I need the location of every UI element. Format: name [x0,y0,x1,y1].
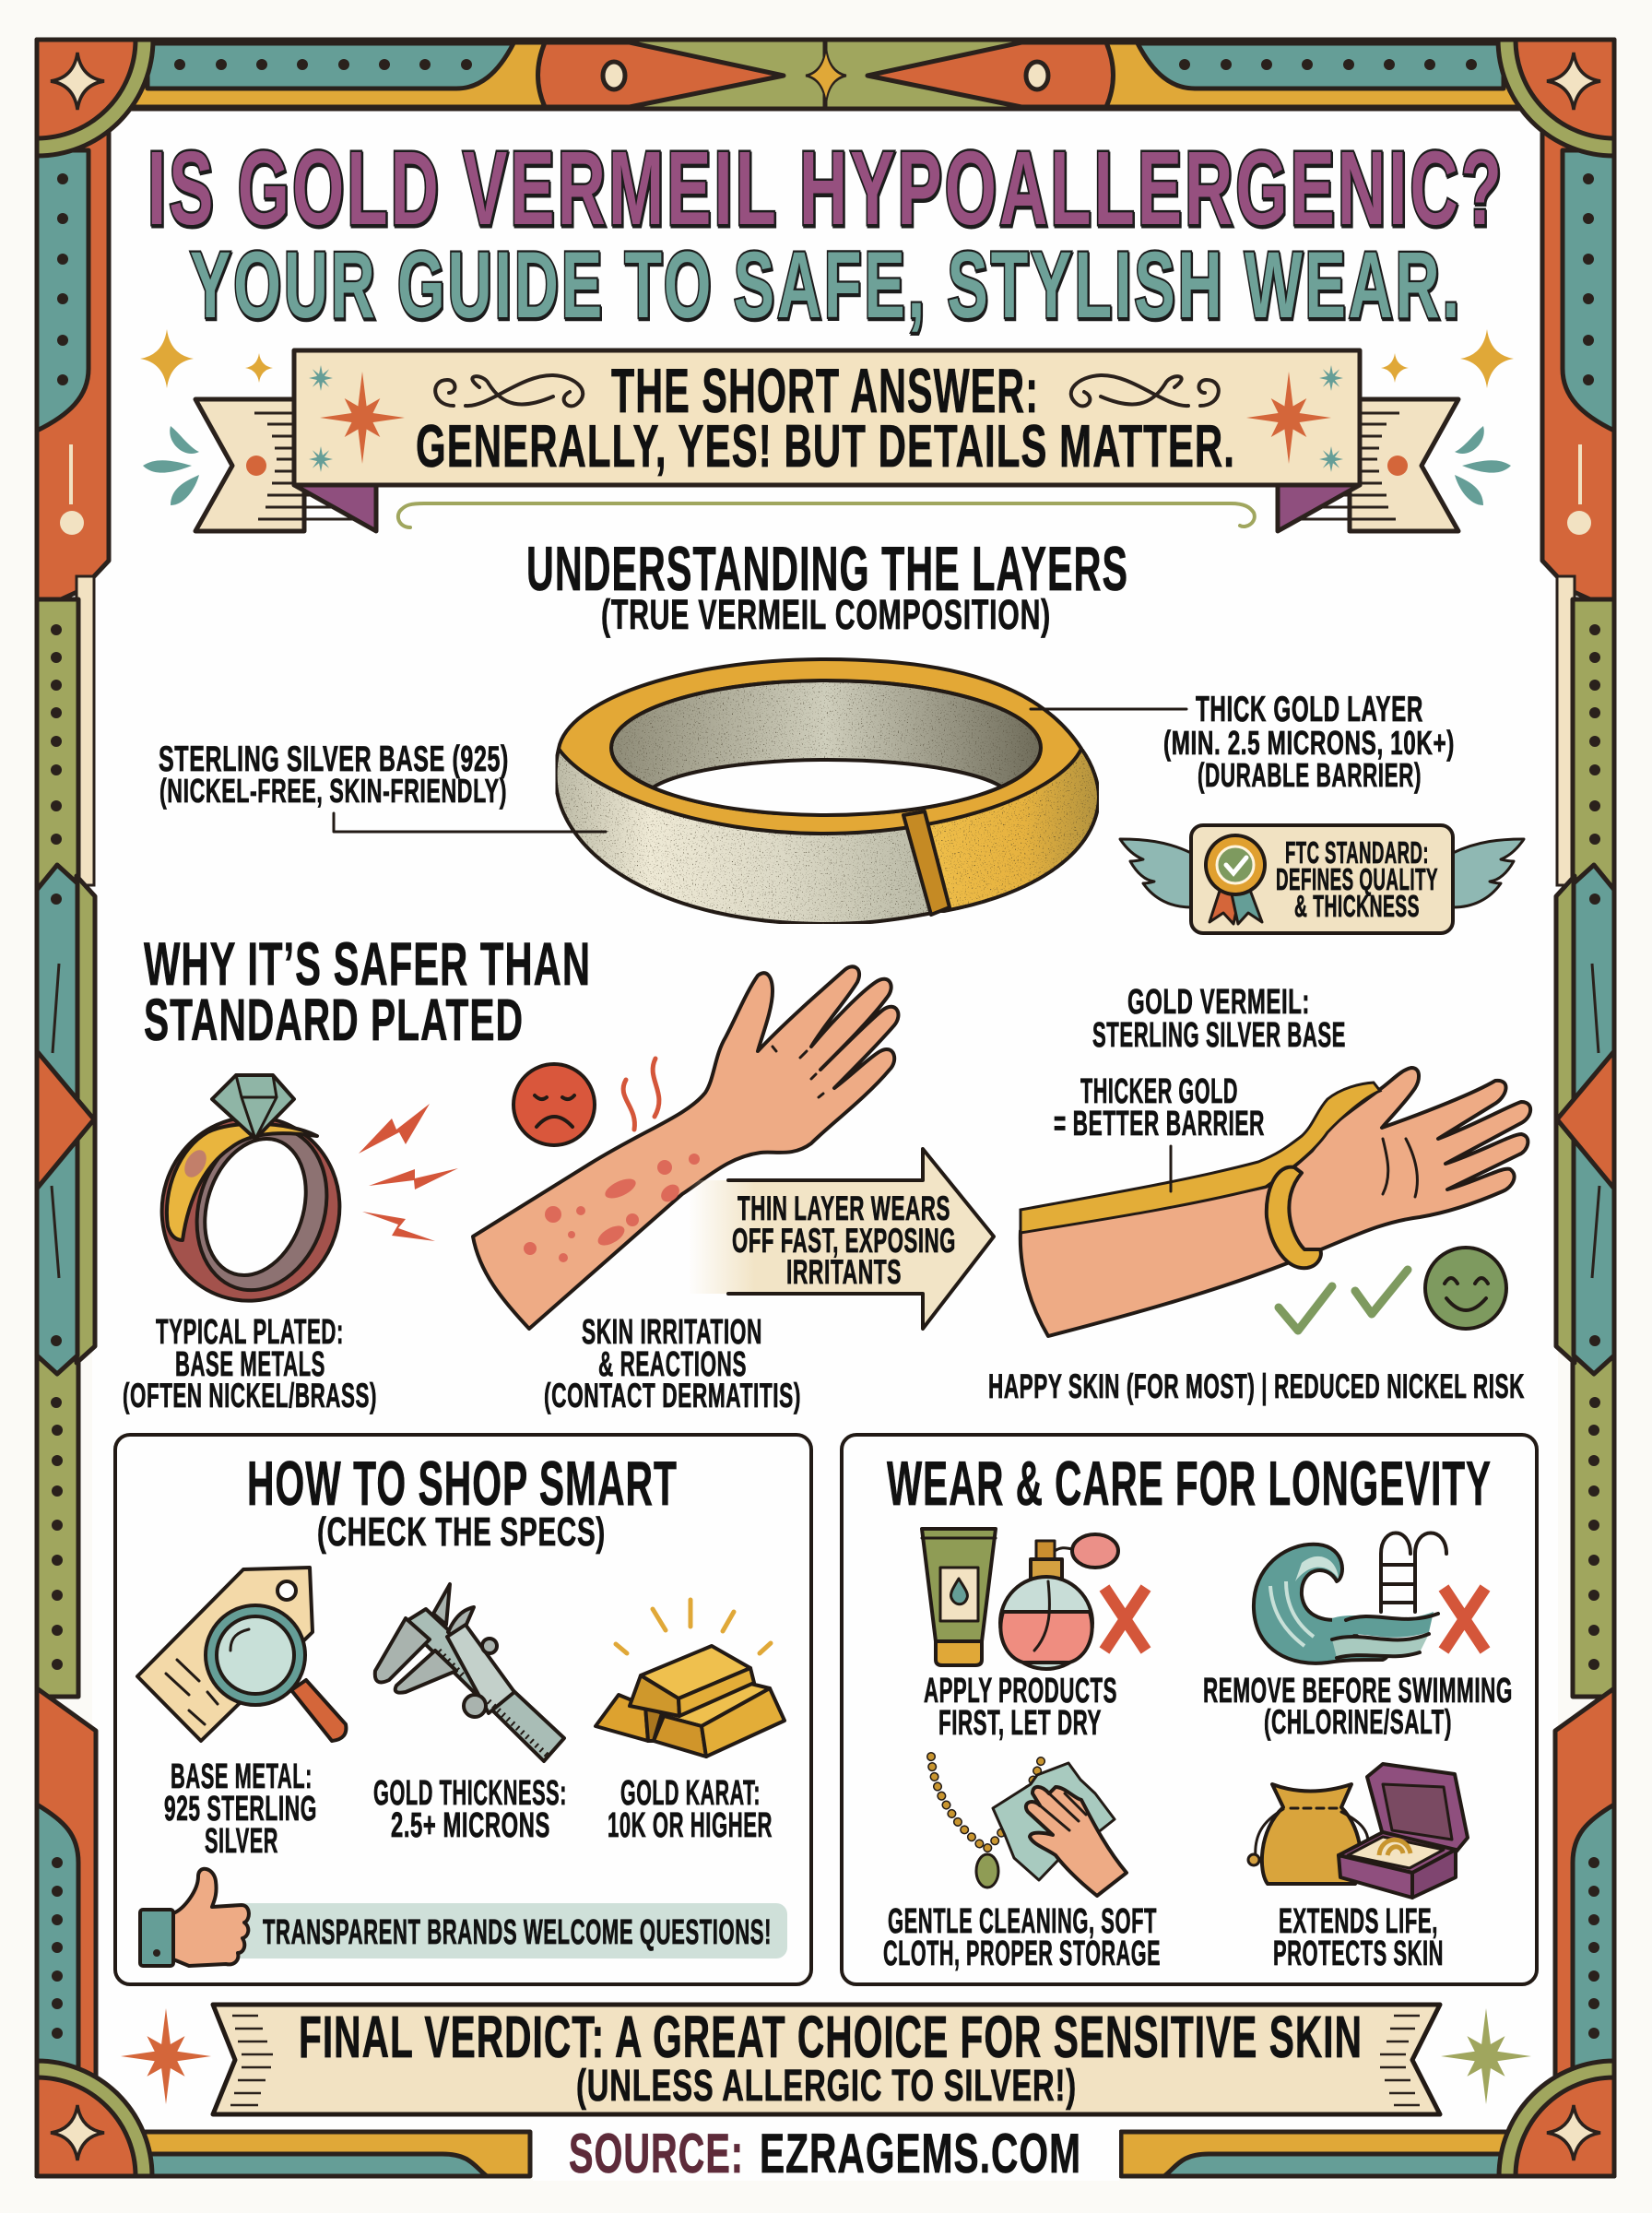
caption: apply products: FIRST, LET DRY [938,1704,1102,1743]
icon: wave and pool ladder [1254,1533,1446,1663]
icon: lotion tube [922,1529,996,1665]
caption: remove before swimming: (CHLORINE/SALT) [1264,1703,1452,1741]
mask frame bottom centre [533,2125,1119,2181]
callout: thick gold layer [1031,690,1455,794]
short answer banner: GENERALLY, YES! BUT DETAILS MATTER. [416,412,1235,479]
caption: base metal [164,1757,317,1861]
source line: EZRAGEMS.COM [760,2123,1081,2184]
caption: skin irritation [544,1313,801,1414]
caption: skin irritation: & REACTIONS [598,1345,747,1384]
heading: why it's safer: WHY IT’S SAFER THAN [144,929,591,998]
icon: check marks [1279,1270,1408,1331]
caption: typical plated: BASE METALS [175,1345,325,1384]
icon: plated ring [138,1075,363,1324]
FTC standard badge: & THICKNESS [1294,889,1420,923]
icon: thumbs up [140,1869,249,1966]
FTC standard badge [1120,825,1524,933]
icon: red X products [1104,1588,1146,1651]
caption: gold karat [608,1774,773,1845]
icon: happy face [1425,1248,1506,1329]
caption: base metal: SILVER [205,1822,278,1861]
icon: perfume bottle [1000,1534,1118,1669]
caption: gold karat: GOLD KARAT: [620,1774,761,1813]
caption: remove before swimming [1203,1672,1513,1741]
caption: skin irritation: (CONTACT DERMATITIS) [544,1377,801,1414]
arrow: thin layer wears off: IRRITANTS [786,1253,902,1291]
icon: tag with magnifier [137,1568,346,1741]
icon: irritation squiggles [623,1059,659,1130]
panel: how to shop smart [115,1435,811,1984]
final verdict ribbon: (UNLESS ALLERGIC TO SILVER!) [576,2062,1077,2111]
caption: extends life: EXTENDS LIFE, [1279,1902,1438,1941]
heading: shop smart: HOW TO SHOP SMART [247,1449,678,1519]
caption: extends life: PROTECTS SKIN [1273,1935,1444,1973]
heading: why it's safer: STANDARD PLATED [144,987,524,1053]
caption: gold thickness: 2.5+ MICRONS [391,1806,550,1845]
heading: understanding the layers: UNDERSTANDING THE LAYERS [526,534,1128,604]
illustration: irritated arm [473,966,898,1329]
short answer banner [294,350,1360,485]
caption: typical plated [123,1313,377,1414]
caption: base metal: 925 STERLING [164,1790,317,1828]
arrow: thin layer wears off [688,1149,994,1329]
icon: pouch and ring box [1248,1764,1468,1898]
caption: gold thickness: GOLD THICKNESS: [373,1774,567,1813]
FTC standard badge: DEFINES QUALITY [1276,862,1438,896]
illustration: healthy arm with gold bangle [1021,1068,1530,1336]
heading: shop smart [247,1449,678,1555]
arrow: thin layer wears off: THIN LAYER WEARS [738,1189,950,1227]
decorative frame: left half [37,40,826,2176]
arrow: thin layer wears off: OFF FAST, EXPOSING [732,1222,956,1260]
icon: irritation lightning bolts [359,1104,458,1241]
caption: extends life [1273,1902,1444,1973]
heading: understanding the layers [526,534,1128,638]
frame centre star [806,47,846,104]
caption: base metal: BASE METAL: [171,1757,313,1796]
icon: olive star [1441,2008,1531,2104]
callout: thicker gold [1054,1072,1265,1143]
callout pill: transparent brands [226,1903,787,1959]
caption: gentle cleaning: GENTLE CLEANING, SOFT [888,1902,1157,1941]
callout: thicker gold: THICKER GOLD [1080,1072,1238,1111]
caption: gold vermeil base [1092,983,1346,1055]
caption: gold thickness [373,1774,567,1845]
caption: typical plated: TYPICAL PLATED: [156,1313,344,1352]
vermeil ring cross-section [556,659,1099,924]
title [148,130,1504,337]
callout: thick gold layer: (DURABLE BARRIER) [1198,756,1422,794]
icon: sad face [513,1064,595,1145]
heading: understanding the layers: (TRUE VERMEIL COMPOSITION) [601,591,1051,638]
callout: sterling silver base [159,740,606,832]
caption: apply products [924,1672,1117,1743]
callout pill: transparent brands: TRANSPARENT BRANDS WELCOME QUESTIONS! [263,1913,772,1952]
FTC standard badge: FTC STANDARD: [1285,835,1429,870]
icon: necklace and cloth [931,1757,1127,1896]
banner underline flourish [398,503,1255,527]
ribbon tails and ornaments right [1278,329,1514,531]
caption: apply products: APPLY PRODUCTS [924,1672,1117,1710]
ribbon tails and ornaments left [140,329,376,531]
caption: gentle cleaning: CLOTH, PROPER STORAGE [883,1935,1161,1973]
callout: thicker gold: = BETTER BARRIER [1054,1105,1265,1143]
icon: gold bars [596,1600,785,1757]
icon: caliper [375,1584,564,1761]
icon: orange star [121,2008,211,2104]
decorative frame: right half [825,40,1614,2176]
callout: sterling silver base: STERLING SILVER BASE (925) [159,740,509,779]
callout: thick gold layer: (MIN. 2.5 MICRONS, 10K+) [1163,724,1455,762]
callout: sterling silver base: (NICKEL-FREE, SKIN-FRIENDLY) [159,772,507,810]
caption: typical plated: (OFTEN NICKEL/BRASS) [123,1377,377,1414]
caption: gentle cleaning [883,1902,1161,1973]
icon: red X swim [1444,1588,1485,1651]
source line: SOURCE: [569,2123,744,2184]
panel: wear and care [842,1435,1537,1984]
heading: why it's safer [144,929,591,1053]
caption: gold vermeil base: STERLING SILVER BASE [1092,1016,1346,1055]
final verdict ribbon [213,2004,1440,2114]
callout: thick gold layer: THICK GOLD LAYER [1196,690,1423,729]
short answer banner: THE SHORT ANSWER: [611,356,1039,426]
source line [569,2123,1081,2184]
heading: shop smart: (CHECK THE SPECS) [317,1509,606,1555]
caption: gold karat: 10K OR HIGHER [608,1806,773,1845]
caption: gold vermeil base: GOLD VERMEIL: [1127,983,1310,1022]
caption: skin irritation: SKIN IRRITATION [582,1313,762,1352]
